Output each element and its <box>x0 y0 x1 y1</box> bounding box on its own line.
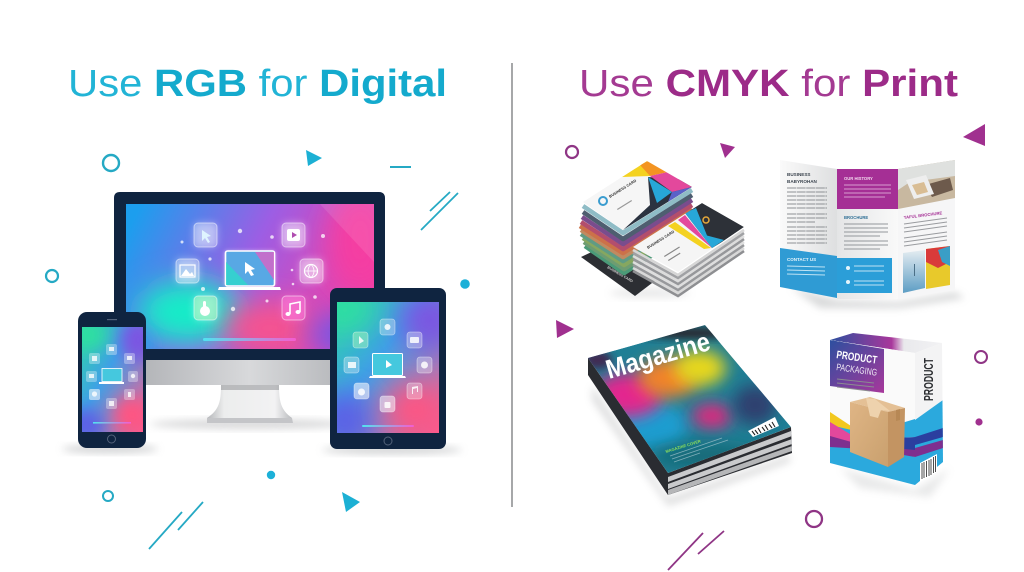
phone app icons <box>86 344 138 409</box>
title: Use RGB for Digital: Use RGB for Digital <box>68 63 447 105</box>
white card stack <box>633 230 744 296</box>
second business card face: BUSINESS CARD <box>646 230 675 250</box>
monitor app icons <box>176 223 325 320</box>
magazine title: Magazine <box>602 326 714 385</box>
device: desktop monitor <box>108 190 392 429</box>
phone laptop glyph <box>99 368 124 384</box>
top business card face <box>583 160 692 230</box>
box side face <box>915 343 943 490</box>
magazine cover caption: MAGAZINE COVER <box>665 438 701 454</box>
monitor silver chin <box>114 358 385 385</box>
phone progress bar <box>93 422 131 424</box>
brochure left panel: CONTACT US <box>787 257 816 262</box>
phone screen <box>82 327 143 432</box>
monitor progress bar <box>203 338 296 341</box>
brochure right panel: TAFUL BROCHURE <box>904 210 943 220</box>
colored card stack <box>580 190 692 273</box>
decorative shapes: print side <box>556 124 987 570</box>
box top face <box>830 333 942 353</box>
box front face: PRODUCT <box>836 349 878 367</box>
device: tablet <box>317 288 462 454</box>
monitor screen <box>126 204 374 349</box>
brochure left panel: BABYROHAN <box>787 179 818 184</box>
print item: product box <box>830 333 950 497</box>
monitor stand <box>207 385 293 423</box>
print item: tri-fold brochure <box>780 160 965 308</box>
decorative shapes: digital side <box>46 150 470 549</box>
dark card lying flat <box>581 248 656 296</box>
magazine cover <box>584 325 791 473</box>
center divider <box>511 63 513 507</box>
brochure right panel <box>898 160 955 299</box>
brochure middle panel: OUR HISTORY <box>844 176 873 181</box>
tablet screen <box>337 302 439 433</box>
box side face: PRODUCT <box>922 358 936 401</box>
magazine cover caption <box>665 438 728 462</box>
tablet home button <box>384 437 392 445</box>
tablet progress bar <box>362 425 414 427</box>
print item: magazine <box>584 325 792 506</box>
brochure left panel <box>780 160 837 298</box>
tablet laptop glyph <box>369 354 406 378</box>
cardboard box illustration <box>850 397 905 467</box>
second business card face <box>633 203 744 272</box>
print item: business cards <box>580 160 744 298</box>
top business card face: BUSINESS CARD <box>608 179 637 199</box>
monitor bezel <box>114 192 385 360</box>
phone speaker <box>107 319 117 320</box>
device: phone <box>62 312 158 453</box>
tablet app icons <box>344 319 432 412</box>
box front face <box>830 340 915 490</box>
magazine barcode <box>748 417 779 437</box>
phone home button <box>108 435 116 443</box>
title: Use CMYK for Print: Use CMYK for Print <box>579 63 958 105</box>
dark card lying flat: BUSINESS CARD <box>606 265 634 284</box>
brochure middle panel: BROCHURE <box>844 215 868 220</box>
box front face: PACKAGING <box>836 362 878 379</box>
brochure middle panel <box>837 169 898 299</box>
monitor laptop glyph <box>218 251 281 290</box>
magazine page stack <box>588 358 792 495</box>
brochure left panel: BUSINESS <box>787 172 810 177</box>
